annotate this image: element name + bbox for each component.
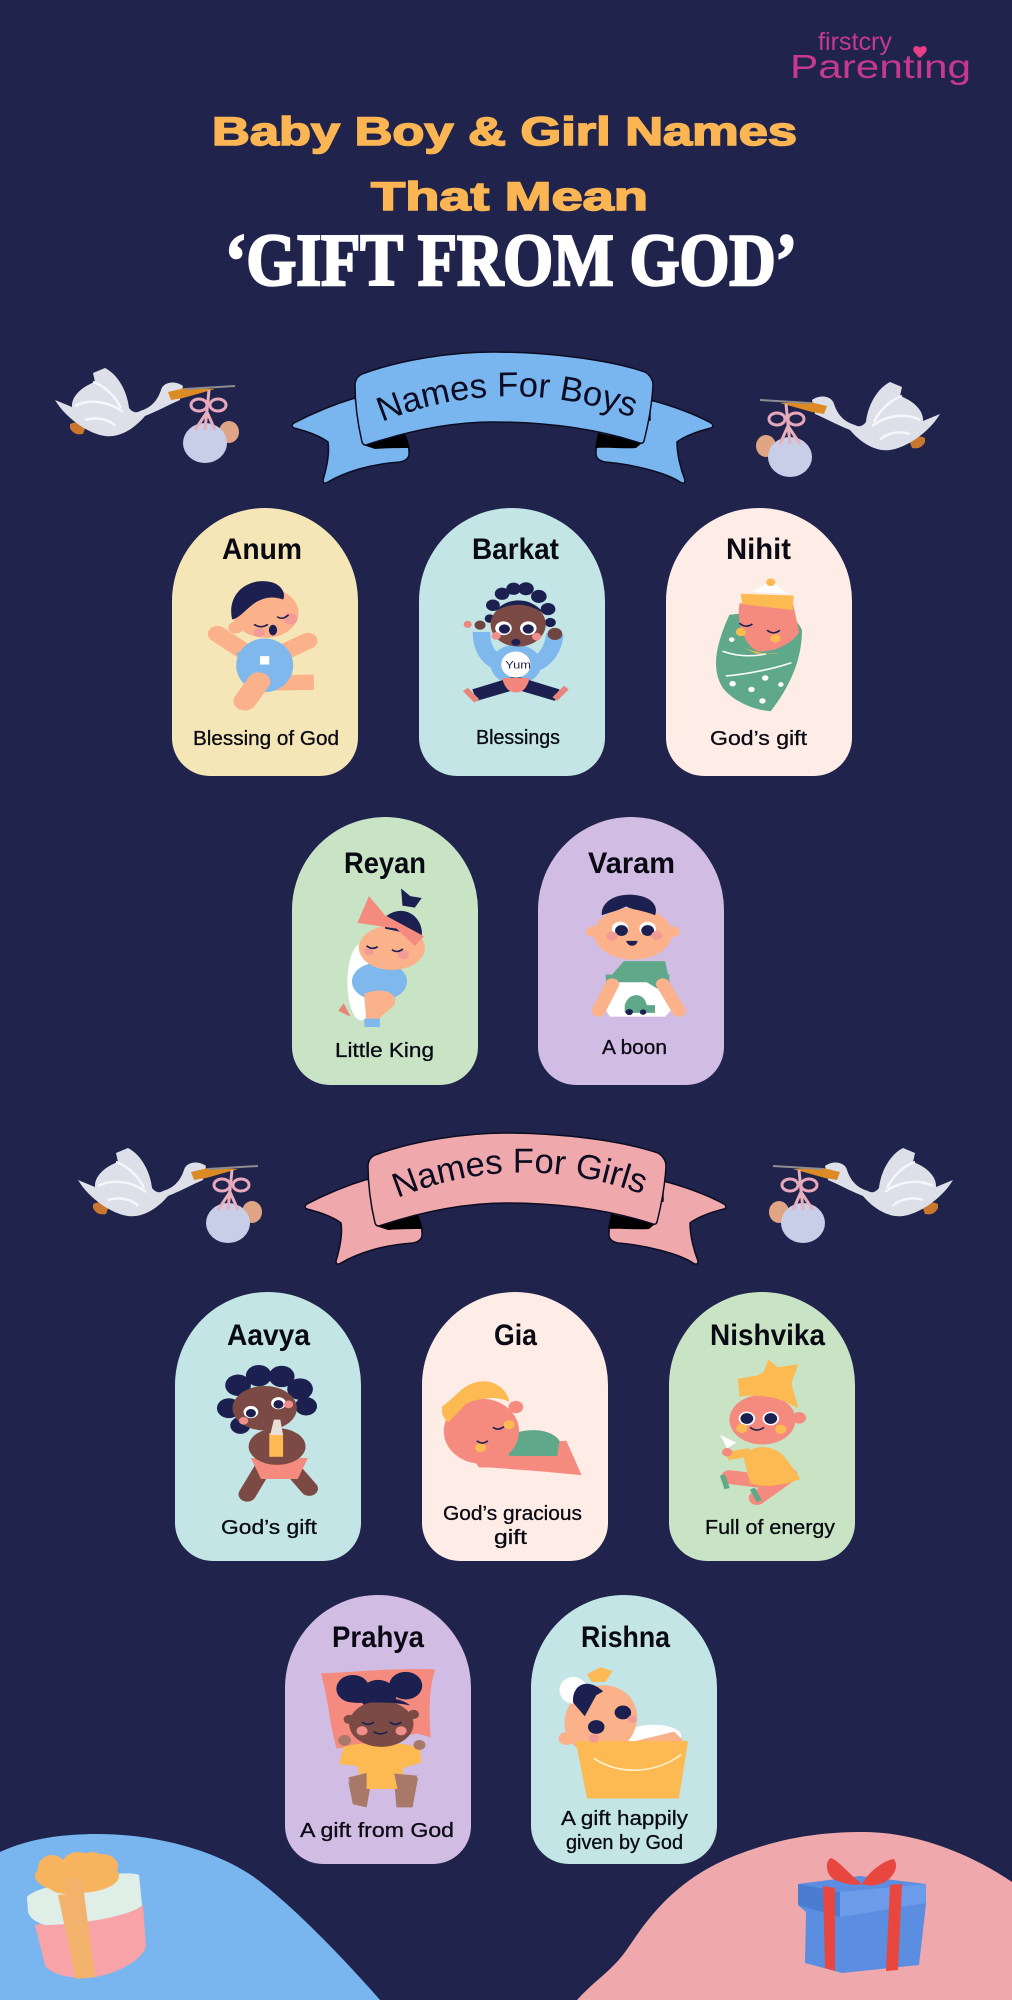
card: Rishna: A gift happily — [561, 1808, 688, 1830]
card: Nihit: God’s gift — [710, 728, 808, 750]
card: Gia: gift — [494, 1527, 528, 1549]
title: That Mean — [371, 175, 648, 219]
ribbon: names for boys — [291, 351, 714, 484]
card: Prahya: Prahya — [332, 1621, 424, 1654]
stork: boys right — [756, 382, 940, 477]
card: Rishna: given by God — [566, 1832, 683, 1854]
logo: FirstCry Parenting: Parenting — [790, 48, 971, 85]
card: Varam: Varam — [588, 847, 675, 880]
logo: FirstCry Parenting: firstcry — [818, 28, 892, 56]
card: Prahya — [285, 1595, 471, 1864]
icon: baby Nishvika — [720, 1360, 806, 1501]
card: Prahya: A gift from God — [300, 1820, 454, 1842]
icon: baby Prahya — [321, 1669, 436, 1807]
stork: girls right — [769, 1148, 953, 1243]
card: Barkat: Blessings — [476, 727, 560, 749]
card: Gia: God’s gracious — [443, 1503, 582, 1525]
card: Gia: Gia — [494, 1319, 537, 1352]
card: Aavya — [175, 1292, 361, 1561]
ribbon: names for girls — [304, 1132, 727, 1265]
icon: baby Gia — [442, 1381, 582, 1475]
card: Barkat: Barkat — [472, 533, 559, 566]
card: Varam — [538, 817, 724, 1085]
card: Aavya: God’s gift — [221, 1517, 318, 1539]
card: Rishna — [531, 1595, 717, 1864]
card: Rishna: Rishna — [581, 1621, 670, 1654]
icon: blue gift box — [798, 1858, 926, 1973]
icon: baby Nihit — [716, 578, 802, 711]
logo: FirstCry Parenting — [790, 28, 971, 85]
card: Nishvika: Nishvika — [710, 1319, 825, 1352]
ribbon: names for girls: Names For Girls — [392, 1148, 646, 1197]
icon: baby Barkat: Yum — [505, 658, 531, 671]
card: Aavya: Aavya — [227, 1319, 310, 1352]
title: ‘GIFT FROM GOD’ — [225, 220, 797, 302]
card: Nishvika — [669, 1292, 855, 1561]
card: Nishvika: Full of energy — [705, 1517, 835, 1539]
icon: baby Barkat — [464, 582, 566, 701]
card: Nihit: Nihit — [726, 533, 791, 566]
card: Nihit — [666, 508, 852, 776]
ribbon: names for boys: Names For Boys — [376, 372, 636, 421]
icon: baby Anum — [217, 581, 314, 701]
stork: boys left — [55, 368, 239, 463]
icon: baby Reyan — [338, 888, 425, 1027]
icon: baby Aavya — [217, 1365, 317, 1494]
title — [212, 110, 797, 302]
icon: baby Varam — [586, 895, 680, 1017]
card: Barkat — [419, 508, 605, 776]
icon: baby Rishna — [555, 1667, 688, 1799]
card: Reyan: Little King — [335, 1040, 434, 1062]
stork: girls left — [78, 1148, 262, 1243]
card: Reyan: Reyan — [344, 847, 426, 880]
corner: blue wave — [0, 1834, 380, 2000]
title: Baby Boy & Girl Names — [212, 110, 797, 154]
corner: pink wave — [577, 1832, 1012, 2000]
card: Anum: Anum — [222, 533, 302, 566]
card: Anum: Blessing of God — [193, 728, 339, 750]
card: Reyan — [292, 817, 478, 1085]
card: Anum — [172, 508, 358, 776]
card: Gia — [422, 1292, 608, 1561]
card: Varam: A boon — [602, 1037, 667, 1059]
icon: round gift box — [27, 1852, 146, 1979]
